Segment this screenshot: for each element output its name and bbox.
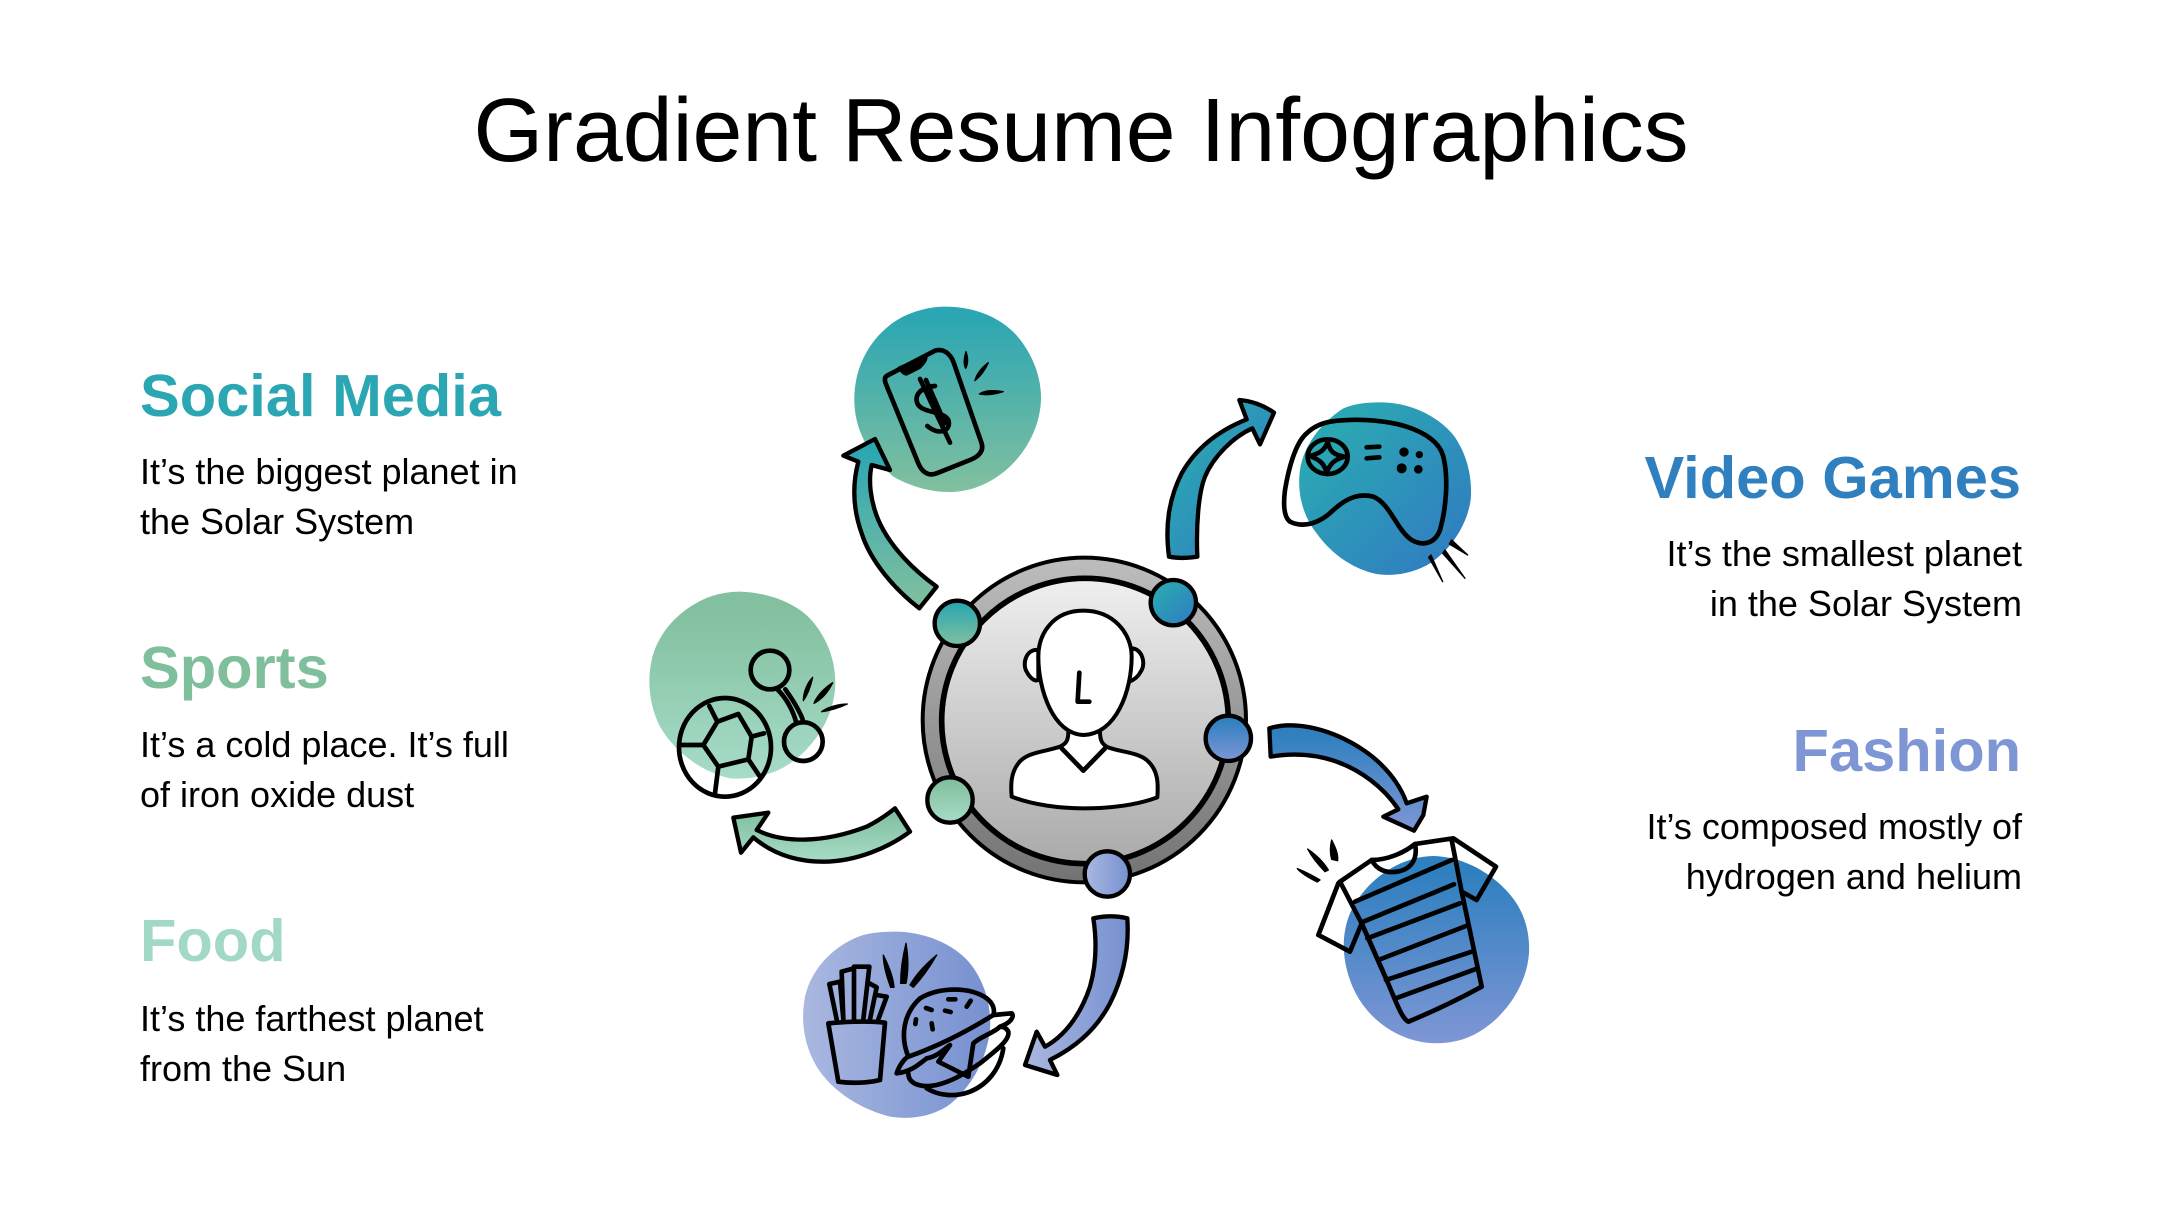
icon group: food burger and fries <box>803 932 1013 1118</box>
gradient blob: social media <box>854 307 1041 492</box>
inner disc <box>942 578 1228 864</box>
icon: dumbbell <box>751 651 847 761</box>
heading: fashion: Fashion <box>1793 717 2021 784</box>
text: fashion description: It’s composed mostly of <box>1646 806 2023 847</box>
panel: sports text <box>140 634 509 815</box>
icon: game controller <box>1284 420 1468 582</box>
icon group: fashion shirt <box>1297 838 1529 1043</box>
gradient blob: sports <box>649 592 835 779</box>
arrow: center to food <box>1025 916 1128 1075</box>
text: social media description: It’s the biggest planet in <box>140 451 518 492</box>
outer ring <box>923 558 1246 882</box>
text: food description: It’s the farthest planet <box>140 998 484 1039</box>
heading: social media: Social Media <box>140 362 502 429</box>
heading: sports: Sports <box>140 634 329 701</box>
icon group: sports ball and dumbbell <box>649 592 847 797</box>
heading: food: Food <box>140 907 286 974</box>
text: video games description: It’s the smallest planet <box>1666 533 2022 574</box>
panel: fashion text <box>1646 717 2023 897</box>
node: food <box>1085 851 1130 897</box>
text: sports description: It’s a cold place. It’s full <box>140 724 509 765</box>
gradient blob: video games <box>1299 402 1471 575</box>
icon: phone with dollar <box>885 350 1003 474</box>
title: Gradient Resume Infographics <box>473 80 1689 180</box>
node: sports <box>927 777 973 823</box>
icon: striped t-shirt <box>1297 838 1496 1022</box>
icon: person avatar <box>1011 611 1158 808</box>
text: sports description: of iron oxide dust <box>140 774 414 815</box>
arrow: center to fashion <box>1269 725 1427 831</box>
gradient blob: fashion <box>1344 856 1529 1043</box>
central profile badge <box>923 558 1251 897</box>
text: social media description: the Solar System <box>140 501 414 542</box>
arrow: center to video games <box>1167 400 1274 558</box>
arrow: center to sports <box>733 808 910 862</box>
arrow: center to social media <box>843 439 937 608</box>
heading: video games: Video Games <box>1644 444 2021 511</box>
text: fashion description: hydrogen and helium <box>1686 856 2022 897</box>
text: video games description: in the Solar System <box>1710 583 2022 624</box>
icon: fries <box>828 943 937 1083</box>
icon group: video games controller <box>1284 402 1471 582</box>
icon group: social media phone <box>854 307 1041 492</box>
gradient blob: food <box>803 932 990 1118</box>
icon: burger <box>897 990 1013 1095</box>
node: social media <box>935 601 980 646</box>
panel: video games text <box>1644 444 2022 624</box>
node: fashion <box>1206 716 1251 761</box>
panel: food text <box>140 907 484 1089</box>
icon: soccer ball <box>679 698 771 797</box>
panel: social media text <box>140 362 518 542</box>
node: video games <box>1151 580 1196 625</box>
text: food description: from the Sun <box>140 1048 346 1089</box>
